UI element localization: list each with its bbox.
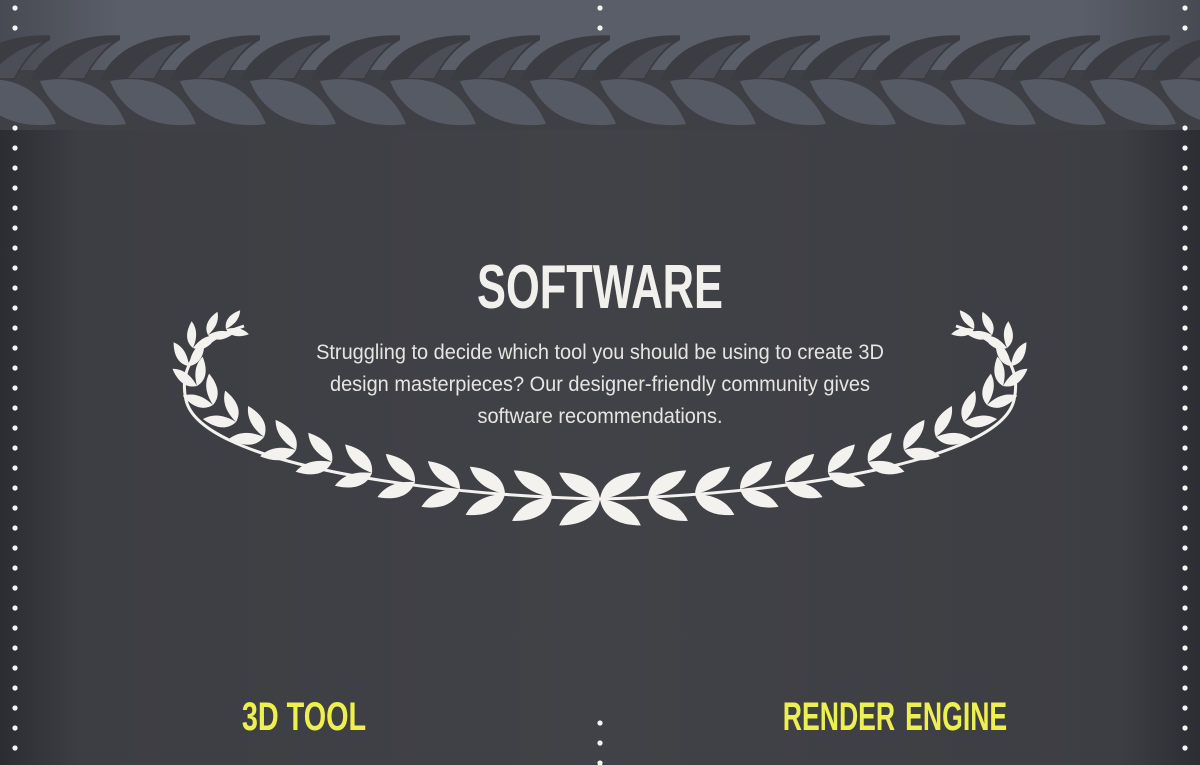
label: render engine: RENDER ENGINE xyxy=(783,695,1007,739)
top band xyxy=(0,0,1200,130)
description text: software recommendations. xyxy=(477,405,723,428)
title: SOFTWARE xyxy=(477,253,723,322)
description text: design masterpieces? Our designer-friendly community gives xyxy=(330,373,870,396)
description text xyxy=(316,341,884,428)
description text: Struggling to decide which tool you should be using to create 3D xyxy=(316,341,884,364)
label: 3D tool: 3D TOOL xyxy=(242,695,366,739)
icon: laurel wreath xyxy=(172,310,1028,526)
